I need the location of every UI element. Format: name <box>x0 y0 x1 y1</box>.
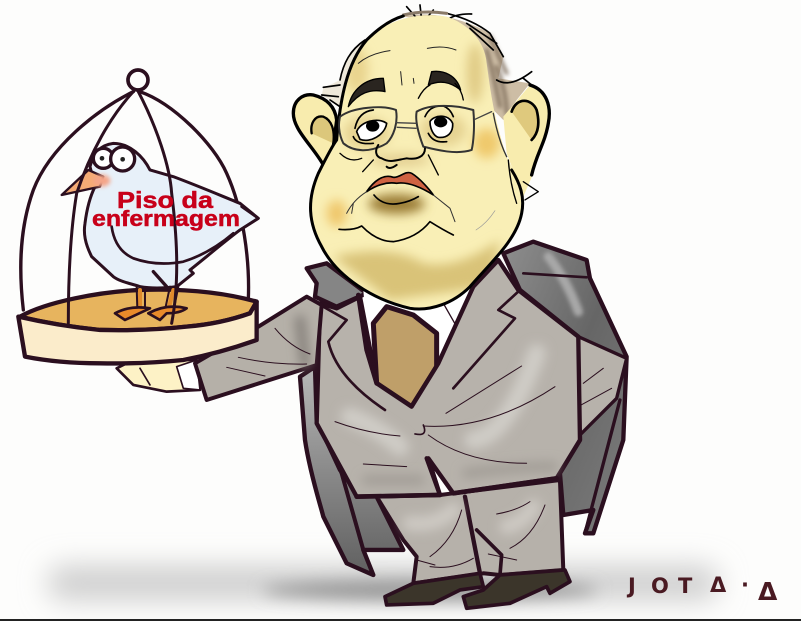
label: Piso da enfermagem: Piso da <box>117 187 213 213</box>
suit jacket front <box>317 260 580 497</box>
tie <box>373 307 437 407</box>
legs and feet <box>140 290 173 310</box>
hair <box>322 5 532 120</box>
cage ring <box>128 70 148 90</box>
wing <box>112 207 258 264</box>
eyes <box>357 120 387 140</box>
birdcage <box>18 70 258 363</box>
signature: Δ <box>758 577 778 606</box>
sleeve and hand <box>117 297 322 400</box>
chin crease <box>339 222 453 242</box>
cage base <box>18 302 257 363</box>
signature: · <box>741 573 749 597</box>
face shading <box>327 43 500 300</box>
pigeon <box>62 143 258 320</box>
cage floor <box>20 290 257 330</box>
hand <box>117 360 200 392</box>
signature: O <box>651 574 669 598</box>
left shoulder <box>307 263 367 307</box>
glasses <box>339 107 397 150</box>
signature: T <box>678 574 693 598</box>
trousers <box>377 480 563 583</box>
cage back bars <box>21 92 249 310</box>
label: Piso da enfermagem <box>92 187 240 231</box>
man figure <box>117 5 627 608</box>
right coat <box>503 242 627 533</box>
nose <box>376 145 425 168</box>
sleeve <box>195 297 322 400</box>
mouth <box>367 173 433 195</box>
signature <box>626 573 778 606</box>
shoes <box>385 570 570 608</box>
beak <box>62 170 103 195</box>
cage front bars <box>68 92 177 323</box>
forehead lines <box>358 47 456 85</box>
signature: Δ <box>710 573 727 597</box>
cheek lines <box>340 153 517 203</box>
ears <box>293 85 549 197</box>
eyebrows <box>348 78 385 107</box>
shirt <box>363 283 477 373</box>
eyes <box>93 148 113 168</box>
left coat drape <box>300 367 403 575</box>
ground shadow <box>48 566 718 600</box>
signature: J <box>626 574 636 598</box>
label: Piso da enfermagem: enfermagem <box>92 206 240 231</box>
head and face <box>311 15 538 309</box>
